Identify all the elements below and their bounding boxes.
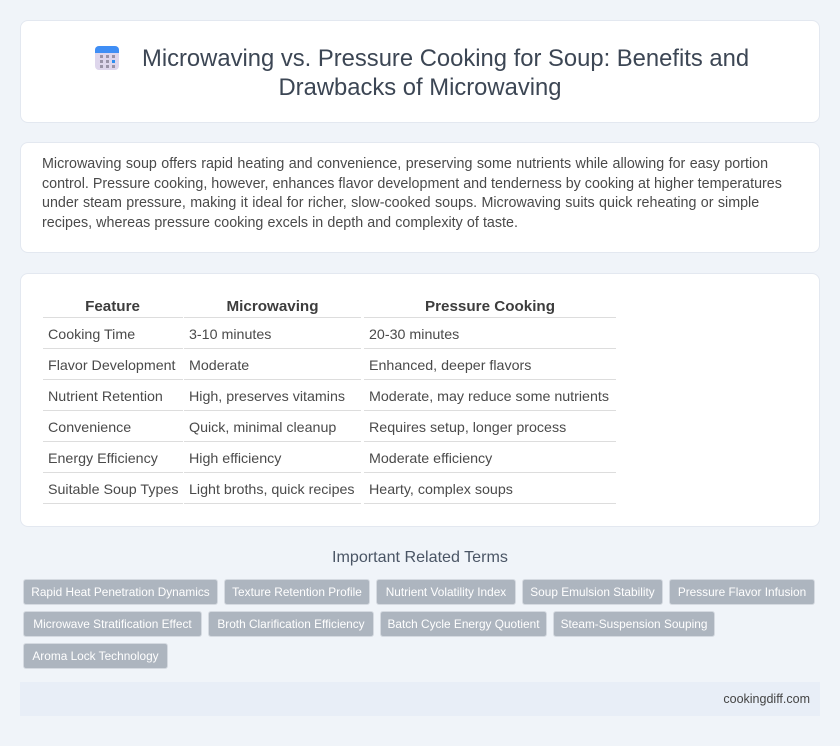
comparison table: Suitable Soup Types xyxy=(48,482,178,498)
related term tags: Soup Emulsion Stability xyxy=(530,585,655,599)
related term tags: Texture Retention Profile xyxy=(232,585,362,599)
footer bar xyxy=(20,682,820,716)
related term tags: Aroma Lock Technology xyxy=(32,649,159,663)
comparison table: Feature xyxy=(85,298,140,315)
panel: title header xyxy=(20,20,820,123)
comparison table: Light broths, quick recipes xyxy=(189,482,355,498)
comparison table: Cooking Time xyxy=(48,327,135,343)
intro paragraph: recipes, whereas pressure cooking excels in depth and complexity of taste. xyxy=(42,215,518,231)
title: Drawbacks of Microwaving xyxy=(278,74,562,101)
comparison table xyxy=(43,298,616,504)
comparison table: Pressure Cooking xyxy=(425,298,555,315)
related term tags: Pressure Flavor Infusion xyxy=(678,585,806,599)
intro paragraph: Microwaving soup offers rapid heating and convenience, preserving some nutrients while allowing for easy portion xyxy=(42,156,768,172)
comparison table: Moderate efficiency xyxy=(369,451,492,467)
comparison table: High efficiency xyxy=(189,451,281,467)
related term tags: Batch Cycle Energy Quotient xyxy=(387,617,540,631)
comparison table: Flavor Development xyxy=(48,358,176,374)
related term tags: Rapid Heat Penetration Dynamics xyxy=(31,585,210,599)
comparison table: Nutrient Retention xyxy=(48,389,163,405)
comparison table: Quick, minimal cleanup xyxy=(189,420,336,436)
intro paragraph xyxy=(42,156,782,231)
panel: comparison table xyxy=(20,273,820,527)
related term tags: Broth Clarification Efficiency xyxy=(217,617,365,631)
related term tags: Steam-Suspension Souping xyxy=(561,617,707,631)
comparison table: 3-10 minutes xyxy=(189,327,271,343)
comparison table: Requires setup, longer process xyxy=(369,420,566,436)
intro paragraph: under steam pressure, making it ideal for richer, slow-cooked soups. Microwaving suits quick reheating or simple xyxy=(42,195,759,211)
related term tags xyxy=(23,579,815,669)
title: Microwaving vs. Pressure Cooking for Soup: Benefits and xyxy=(142,45,749,72)
comparison table: High, preserves vitamins xyxy=(189,389,345,405)
related term tags: Nutrient Volatility Index xyxy=(386,585,506,599)
comparison table: Microwaving xyxy=(226,298,318,315)
footer source text: cookingdiff.com xyxy=(723,692,810,706)
title xyxy=(142,45,749,101)
comparison table: Moderate, may reduce some nutrients xyxy=(369,389,609,405)
comparison table: Hearty, complex soups xyxy=(369,482,513,498)
comparison table: Energy Efficiency xyxy=(48,451,158,467)
comparison table: Convenience xyxy=(48,420,131,436)
related term tags: Microwave Stratification Effect xyxy=(33,617,192,631)
intro paragraph: control. Pressure cooking, however, enhances flavor development and tenderness by cooking at higher temperatures xyxy=(42,176,782,192)
comparison table: Enhanced, deeper flavors xyxy=(369,358,531,374)
heading: important related terms: Important Related Terms xyxy=(332,548,508,566)
comparison table: Moderate xyxy=(189,358,249,374)
panel: introduction text xyxy=(20,142,820,253)
icon: calendar xyxy=(95,46,119,70)
comparison table: 20-30 minutes xyxy=(369,327,459,343)
